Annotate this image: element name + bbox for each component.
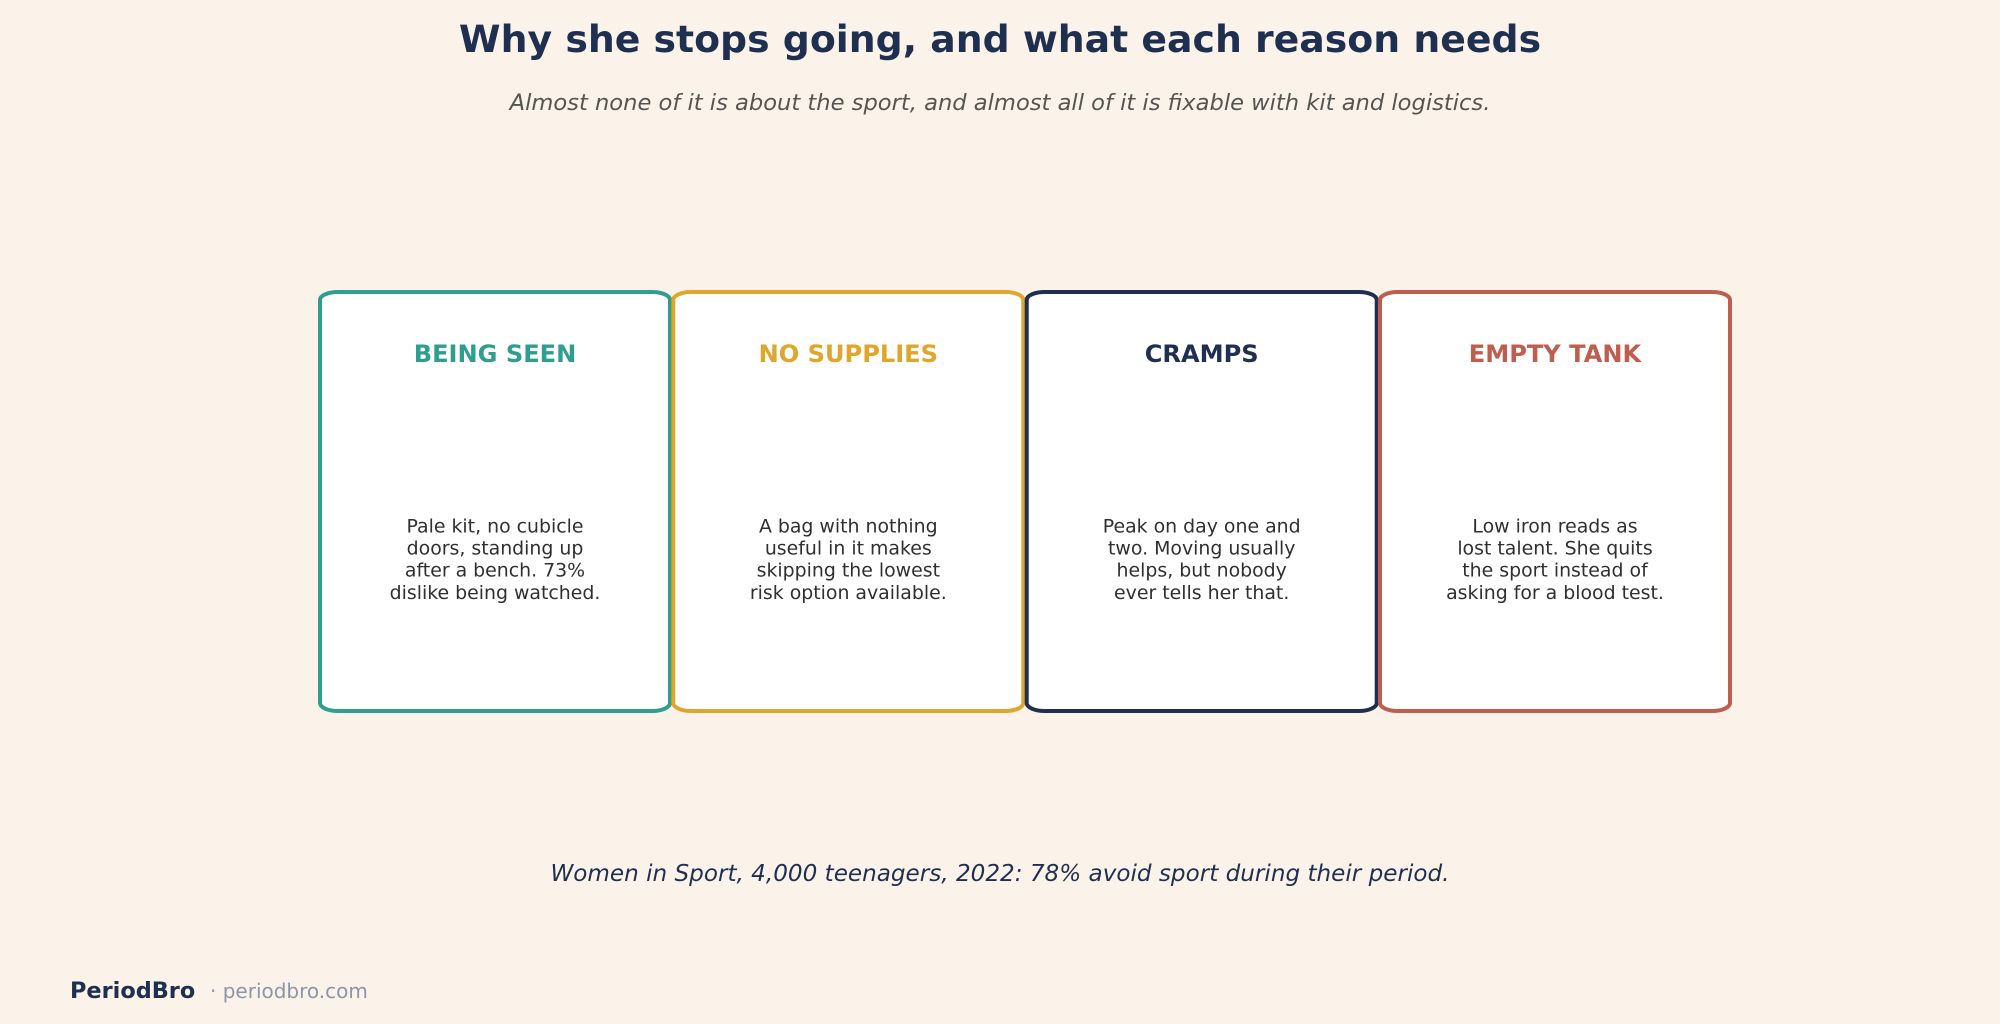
heading: cramps: CRAMPS [1145,340,1259,368]
text: being seen: dislike being watched. [390,582,600,604]
text: being seen: doors, standing up [407,538,583,560]
text: no supplies: A bag with nothing [759,516,938,538]
brand footer [70,978,368,1004]
panel: cramps [1027,292,1377,711]
text: no supplies: skipping the lowest [757,560,940,582]
panel: empty tank [1380,292,1730,711]
brand footer: PeriodBro [70,978,195,1004]
text: cramps: helps, but nobody [1117,560,1287,582]
text: cramps: two. Moving usually [1108,538,1295,560]
title: Why she stops going, and what each reason needs [459,17,1541,61]
panel: being seen [320,292,670,711]
text: empty tank: Low iron reads as [1472,516,1638,538]
text: cramps: ever tells her that. [1114,582,1289,604]
text: being seen: Pale kit, no cubicle [406,516,584,538]
source note: Women in Sport, 4,000 teenagers, 2022: 78% avoid sport during their period. [550,861,1450,887]
text: being seen: after a bench. 73% [405,560,585,582]
panel: no supplies [673,292,1023,711]
heading: no supplies: NO SUPPLIES [759,340,938,368]
brand footer: · periodbro.com [210,979,368,1003]
text: no supplies: useful in it makes [765,538,932,560]
subtitle: Almost none of it is about the sport, and almost all of it is fixable with kit and logistics. [508,90,1490,116]
text: empty tank: lost talent. She quits [1457,538,1653,560]
heading: empty tank: EMPTY TANK [1469,340,1643,368]
text: cramps: Peak on day one and [1103,516,1301,538]
text: empty tank: the sport instead of [1462,560,1649,582]
text: no supplies: risk option available. [750,582,947,604]
text: empty tank: asking for a blood test. [1446,582,1664,604]
heading: being seen: BEING SEEN [414,340,576,368]
